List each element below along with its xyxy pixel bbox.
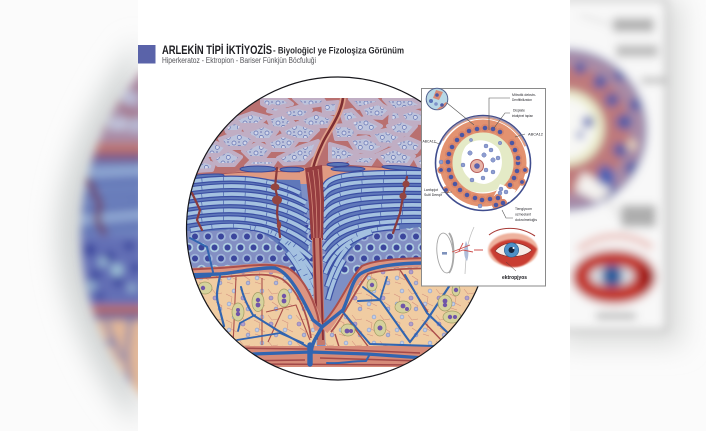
left shadow [58, 40, 138, 425]
lens diagram [435, 227, 483, 274]
right blurred panel [570, 0, 669, 328]
heading subtitle: - Biyoloğicl ye Fizoloşiza Görünüm [273, 45, 404, 56]
dermal cell clusters [198, 279, 461, 336]
blood vessels [180, 238, 450, 364]
panel labels: ABCA12 [422, 140, 436, 144]
title marker square [138, 45, 156, 64]
heading: ARLEKİN TİPİ İKTİYOZİS [162, 44, 272, 57]
panel frame [422, 88, 546, 286]
leader lines [434, 98, 525, 218]
panel labels: Displate [513, 108, 525, 112]
panel labels: Tienglycom [515, 207, 532, 211]
follicle magnified circle [436, 116, 530, 210]
right shadow [560, 0, 682, 345]
salmon band with elongated cells [196, 162, 421, 184]
keratin cracks [192, 168, 410, 237]
blue lamellar strips left [187, 176, 314, 300]
panel labels: Sultl Deeqir [424, 193, 443, 197]
central vessel [470, 160, 484, 172]
scattered central cells [439, 138, 508, 208]
eye caption: ektropjyos [502, 275, 527, 281]
small magnifier circle [426, 88, 450, 112]
left blurred illustration [75, 68, 138, 400]
pale inner tissue [451, 128, 513, 192]
panel labels: Lanfopjot [424, 188, 439, 192]
connective tissue walls [192, 257, 441, 346]
panel labels: ozmeelant [515, 212, 532, 216]
panel labels: Denfitbilizaton [512, 98, 532, 102]
panel labels: Mitrotik dekstn- [512, 93, 537, 97]
nuclei ring [438, 125, 528, 208]
stratum corneum layer [197, 98, 421, 175]
panel labels: dokrolmeloğis [515, 218, 537, 222]
subtitle: Hiperkeratoz - Ektropion - Bariser Fünkjün Böcfuluği [162, 56, 316, 65]
main circular skin cross-section [178, 77, 495, 380]
circle outline [186, 77, 490, 380]
salmon cell ring [446, 126, 520, 200]
everted eye [488, 228, 538, 271]
panel labels: intatiyinel tapian [512, 114, 533, 118]
central fissure [305, 98, 343, 345]
dermis left dome [196, 272, 318, 346]
inset panel [422, 88, 546, 286]
white central page [138, 0, 570, 431]
dermis right dome [325, 266, 478, 346]
panel labels [422, 93, 543, 281]
blue lamellar strips right [323, 172, 430, 300]
title block [138, 44, 404, 65]
panel labels: ABCA12 [528, 132, 543, 136]
granular layer [188, 225, 421, 274]
lower connective band [244, 346, 432, 367]
